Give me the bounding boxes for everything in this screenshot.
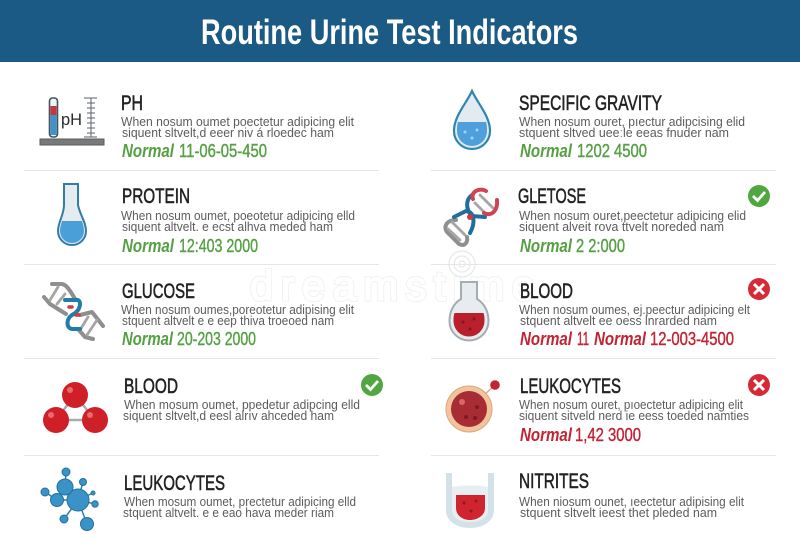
icon: red cell: [446, 380, 500, 432]
description: When niosum ounet, ıeectetur adipising elit: [519, 494, 744, 509]
abnormal value: Normal: [520, 329, 573, 349]
description: [519, 208, 746, 234]
normal value: [122, 141, 267, 161]
description: [123, 494, 356, 520]
heading: BLOOD: [520, 280, 573, 303]
normal value: [122, 329, 256, 349]
normal value: 20-203 2000: [177, 329, 256, 349]
panel: leukocytes (left): [41, 468, 356, 530]
description: siquent alveit rova ttvelt noreded nam: [519, 219, 724, 234]
panel: blood (right): [450, 278, 770, 349]
description: [519, 302, 750, 328]
description: [121, 114, 354, 140]
description: [519, 397, 749, 423]
icon: round flask: [450, 282, 488, 340]
panel: protein: [58, 184, 355, 256]
normal value: 11-06-05-450: [179, 141, 267, 161]
heading: SPECIFIC GRAVITY: [519, 92, 662, 115]
panel: specific gravity: [454, 91, 745, 161]
icon: water drop: [454, 91, 490, 149]
panel: pH: [40, 92, 354, 161]
normal value: 1202 4500: [577, 141, 647, 161]
watermark: dreamstime: [250, 262, 535, 309]
description: When nosum oumes, ej.peectur adipicing elt: [519, 302, 750, 317]
heading: GLUCOSE: [122, 280, 195, 303]
normal value: 2 2:000: [576, 236, 625, 256]
status: cross: [748, 278, 770, 300]
icon: red cup: [446, 473, 494, 528]
description: stquent altvelt. e e eao hava meder riam: [123, 505, 334, 520]
status: check: [748, 185, 770, 207]
heading: PH: [121, 92, 143, 115]
description: [519, 114, 745, 140]
normal value: [520, 236, 625, 256]
panel: leukocytes (right): [446, 374, 770, 445]
normal value: [122, 236, 258, 256]
description: When nosum oumes,poreotetur adipising elit: [121, 302, 354, 317]
description: siquent sltvelt,d eeer niv á rloedec ham: [122, 125, 334, 140]
description: When nosum ouret,peectetur adipicing elid: [519, 208, 746, 223]
panel: glucose: [44, 280, 354, 349]
status: cross: [748, 374, 770, 396]
panel: gletose: [445, 185, 770, 256]
description: [519, 494, 744, 520]
watermark: dreamstime: [250, 262, 535, 309]
icon: blue cells: [41, 468, 98, 530]
abnormal value: 12-003-4500: [650, 329, 734, 349]
description: siquent sltvelt,d eesl alrıv ahceded ham: [123, 408, 334, 423]
heading: LEUKOCYTES: [124, 472, 225, 495]
description: When nosum oumet poectetur adipicing elit: [121, 114, 354, 129]
status: check: [361, 374, 383, 396]
abnormal value: Normal: [520, 425, 573, 445]
heading: BLOOD: [124, 375, 178, 398]
heading: PROTEIN: [122, 185, 190, 208]
description: stquent altvelt e e eep thiva troeoed nam: [122, 313, 334, 328]
panel: blood (left): [43, 374, 383, 433]
description: When mosum oumet, ppedetur adipcing elld: [124, 397, 360, 412]
header banner: [0, 0, 800, 62]
normal value: Normal: [520, 236, 573, 256]
description: When mosum oumet, prectetur adipicing elld: [124, 494, 356, 509]
abnormal value: 11: [577, 329, 589, 349]
description: stquent altvelt ee oess lnrarded nam: [520, 313, 717, 328]
panel: nitrites: [446, 470, 744, 528]
description: [121, 208, 355, 234]
normal value: Normal: [520, 141, 573, 161]
description: [123, 397, 360, 423]
description: When nosum oumet, poeotetur adipicing elld: [121, 208, 355, 223]
normal value: 12:403 2000: [179, 236, 258, 256]
description: When nosum ouret, pıoectetur adipicing elit: [519, 397, 743, 412]
normal value: Normal: [122, 329, 174, 349]
description: stquent sltved ueeːle eeas fnuder nam: [519, 125, 729, 140]
icon: flask: [58, 184, 86, 245]
description: siquent altvelt. e ecst alhva meded ham: [122, 219, 333, 234]
heading: NITRITES: [519, 470, 589, 493]
heading: LEUKOCYTES: [520, 375, 621, 398]
icon: red molecule: [43, 382, 108, 433]
icon: pH tube: [40, 98, 104, 145]
abnormal value: [520, 329, 734, 349]
description: siquent sitveld nerd ie eess toeded namties: [519, 408, 749, 423]
normal value: [520, 141, 647, 161]
description: When nosum ouret, pıectur adipcising elid: [519, 114, 745, 129]
icon: DNA helix grey: [44, 284, 103, 339]
abnormal value: 1,42 3000: [575, 425, 641, 445]
heading: GLETOSE: [518, 185, 586, 208]
abnormal value: [520, 425, 641, 445]
title: Routine Urine Test Indicators: [201, 13, 578, 52]
normal value: Normal: [122, 236, 175, 256]
description: [121, 302, 354, 328]
icon: pH tube: pH: [61, 110, 82, 129]
icon: DNA helix: [445, 190, 497, 245]
description: stquent sltvelt ieest thet pleded nam: [520, 505, 717, 520]
normal value: Normal: [122, 141, 175, 161]
abnormal value: Normal: [594, 329, 647, 349]
